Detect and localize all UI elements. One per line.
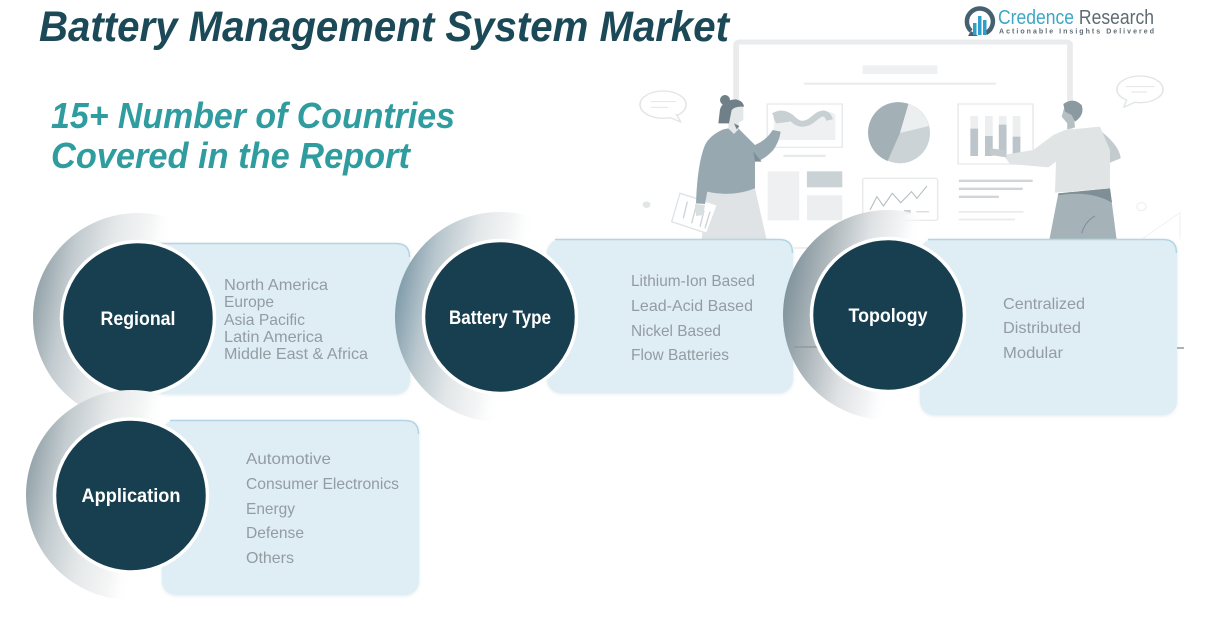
battery type circle [424, 240, 576, 394]
application list: Others [246, 550, 294, 567]
battery type crescent [395, 212, 605, 422]
regional list: Europe [224, 294, 274, 311]
monitor edge line [794, 347, 1184, 348]
bar chart card [958, 104, 1033, 164]
subtitle: 15+ Number of Countries [51, 95, 455, 136]
regional crescent [33, 213, 243, 423]
woman presenter [672, 95, 790, 240]
application crescent [26, 390, 236, 600]
logo tagline: Actionable Insights Delivered [999, 28, 1154, 36]
topology crescent [783, 210, 993, 420]
text lines [959, 180, 1033, 220]
area chart card [767, 104, 842, 157]
monitor stand lines [794, 248, 830, 283]
topology label: Topology [848, 306, 928, 327]
monitor and charts [640, 42, 1180, 380]
regional list [224, 277, 368, 363]
logo icon [967, 9, 993, 36]
monitor heading [804, 65, 996, 85]
layout blocks [768, 171, 842, 220]
regional list: Middle East & Africa [224, 346, 368, 363]
pie chart [868, 102, 930, 163]
application list: Defense [246, 525, 304, 542]
card: Battery Type [395, 212, 793, 422]
regional list: Latin America [224, 329, 323, 346]
topology panel [920, 239, 1177, 415]
application label: Application [82, 486, 180, 507]
regional label: Regional [100, 309, 176, 330]
man presenter [990, 101, 1121, 240]
subtitle [51, 95, 455, 176]
battery type list: Lithium-Ion Based [631, 273, 755, 290]
logo: Credence Research [967, 6, 1154, 36]
application list: Automotive [246, 451, 331, 468]
battery type list: Nickel Based [631, 323, 721, 340]
speech bubble right [1117, 76, 1163, 107]
card: Topology [783, 210, 1184, 420]
illustration: presentation scene [640, 42, 1180, 380]
battery type list: Flow Batteries [631, 347, 729, 364]
card: Regional [33, 213, 410, 423]
regional panel [150, 243, 410, 394]
application circle [54, 419, 208, 572]
regional circle [62, 242, 214, 394]
logo wordmark: Credence Research [998, 6, 1154, 29]
topology list [1003, 296, 1085, 362]
battery type list: Lead-Acid Based [631, 298, 753, 315]
topology list: Distributed [1003, 320, 1081, 337]
battery type panel [547, 239, 793, 393]
subtitle: Covered in the Report [51, 135, 412, 176]
application list [246, 451, 399, 567]
regional list: Asia Pacific [224, 312, 305, 329]
title: Battery Management System Market [39, 3, 731, 51]
application panel [162, 420, 419, 595]
topology list: Modular [1003, 345, 1064, 362]
topology list: Centralized [1003, 296, 1085, 313]
monitor frame [736, 42, 1070, 380]
topology circle [812, 238, 964, 392]
battery type label: Battery Type [449, 308, 551, 329]
application list: Energy [246, 501, 295, 518]
line chart card [863, 178, 938, 220]
battery type list [631, 273, 755, 364]
regional list: North America [224, 277, 328, 294]
card: Application [26, 390, 419, 600]
application list: Consumer Electronics [246, 476, 399, 493]
speech bubble left [640, 91, 686, 122]
decorative dots [643, 201, 1180, 239]
